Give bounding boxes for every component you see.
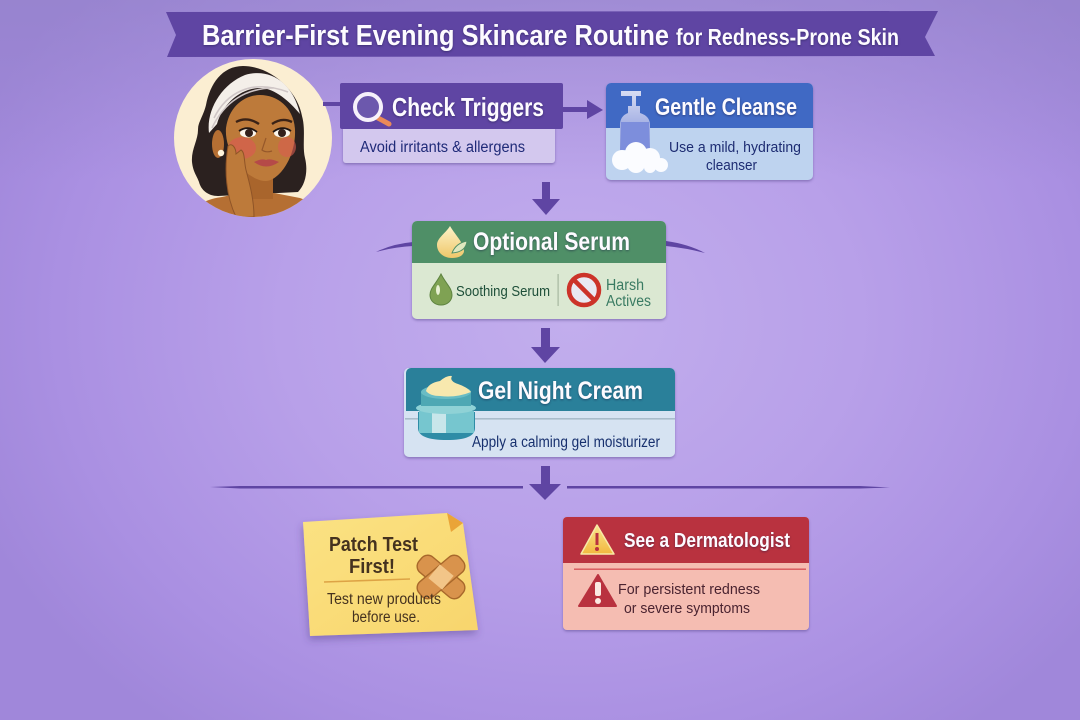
panel: gentle cleanse: cleanser [706, 157, 757, 174]
connector: portrait to check triggers [323, 102, 341, 106]
note paper [303, 513, 478, 636]
header box [406, 368, 675, 411]
subtitle text: for Redness-Prone Skin [676, 24, 899, 50]
icon: warning triangle red [579, 575, 616, 606]
heading: Check Triggers [392, 92, 544, 122]
body box [343, 125, 555, 163]
decorative flourishes beside serum [376, 241, 705, 253]
icon: cream jar [416, 376, 476, 440]
portrait: woman touching cheek [174, 59, 332, 217]
heading: Patch Test [329, 534, 418, 556]
label: soothing serum: Soothing Serum [456, 283, 550, 300]
label: harsh actives [606, 277, 651, 310]
arrow: triggers to cleanse [563, 100, 603, 119]
label: harsh actives: Actives [606, 293, 651, 310]
heading: Optional Serum [473, 228, 630, 256]
icon: warning triangle yellow [581, 525, 614, 554]
description: Apply a calming gel moisturizer [472, 434, 660, 451]
description: For persistent redness [618, 581, 760, 598]
folded corner [447, 513, 463, 532]
heading: First! [349, 556, 395, 578]
panel: see a dermatologist [563, 517, 809, 630]
title banner [166, 11, 938, 57]
icon: prohibited sign [569, 275, 599, 305]
description: or severe symptoms [624, 600, 750, 617]
heading: Gentle Cleanse [655, 94, 797, 121]
body box [563, 517, 809, 630]
header box [412, 221, 666, 263]
panel: check triggers [340, 83, 563, 163]
icon: drop and leaf [437, 226, 467, 258]
description: Avoid irritants & allergens [360, 139, 525, 156]
title text: Barrier-First Evening Skincare Routine [202, 20, 669, 52]
heading: See a Dermatologist [624, 530, 790, 552]
description [327, 591, 441, 626]
panel: optional serum [412, 221, 666, 319]
body box [606, 83, 813, 180]
branch lines [210, 486, 890, 488]
icon: soothing serum drop [430, 274, 452, 305]
heading: Gel Night Cream [478, 377, 643, 405]
arrow: down to serum [532, 182, 560, 215]
icon: magnifying glass [355, 94, 389, 124]
icon: adhesive bandage [414, 552, 468, 602]
description: before use. [352, 609, 420, 626]
icon: pump bottle with foam [612, 91, 668, 173]
body box [404, 368, 675, 457]
heading [329, 534, 418, 578]
arrow: down to night cream [531, 328, 560, 363]
description [618, 581, 760, 617]
header box [606, 83, 813, 128]
header box [340, 83, 563, 129]
description: Test new products [327, 591, 441, 608]
header box [563, 517, 809, 563]
body box [412, 221, 666, 319]
label: harsh actives: Harsh [606, 277, 644, 294]
hair is drawn behind the face [192, 66, 306, 196]
description: Use a mild, hydrating [669, 139, 801, 156]
arrow: down to outcomes [529, 466, 561, 500]
panel: gel night cream [404, 368, 675, 457]
callout: patch test sticky note [303, 513, 478, 636]
panel: gentle cleanse [606, 83, 813, 180]
